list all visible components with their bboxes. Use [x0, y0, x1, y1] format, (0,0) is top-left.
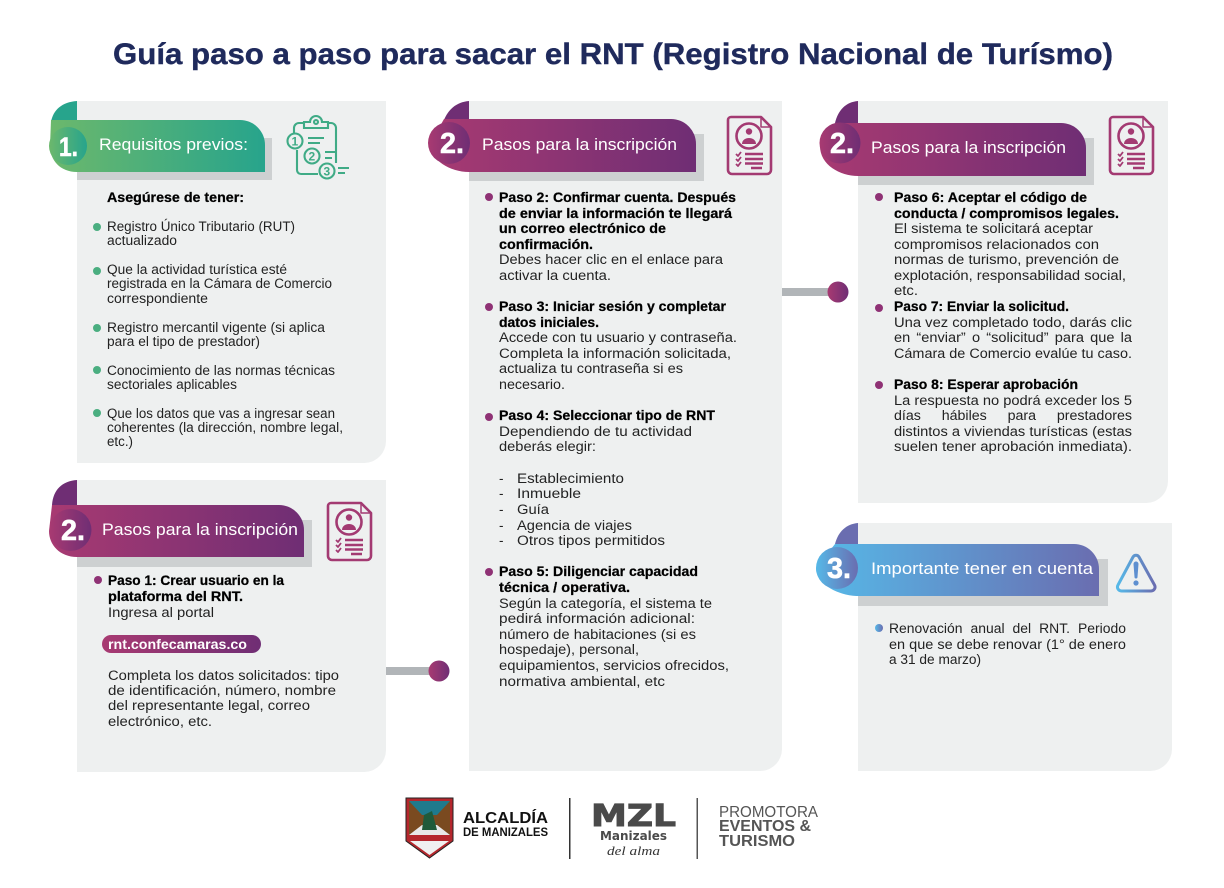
- text: paso 7: Cámara de Comercio evalúe tu caso.: [894, 346, 1132, 361]
- text: checklist: Registro Único Tributario (RUT): [107, 219, 295, 234]
- text: paso 8: Paso 8: Esperar aprobación: [894, 377, 1078, 392]
- text: paso 6: Paso 6: Aceptar el código de: [894, 190, 1088, 205]
- panel: pasos 2 a 5: [428, 101, 782, 771]
- panel: pasos 6 a 8: [820, 101, 1168, 503]
- icon: clipboard checklist: 3: [324, 164, 330, 178]
- text: checklist: correspondiente: [107, 291, 208, 306]
- panel: requisitos previos: [49, 101, 386, 463]
- text: paso 4: deberás elegir:: [499, 439, 596, 454]
- logo: Alcaldía de Manizales: DE MANIZALES: [463, 825, 548, 839]
- text: paso 3: Completa la información solicitada,: [499, 346, 731, 361]
- text: paso 5: normativa ambiental, etc: [499, 674, 665, 689]
- text: renovación: Renovación anual del RNT. Periodo: [889, 621, 1126, 636]
- text: checklist: registrada en la Cámara de Comercio: [107, 276, 332, 291]
- text: checklist: [93, 190, 343, 449]
- link pill: [102, 635, 261, 653]
- logo: Promotora Eventos & Turismo: TURISMO: [719, 833, 795, 850]
- text: paso 6: compromisos relacionados con: [894, 237, 1099, 252]
- section header 2: [49, 480, 312, 567]
- text: paso 8: La respuesta no podrá exceder los 5: [894, 393, 1132, 408]
- section header 2: 2.: [830, 128, 854, 160]
- section header 2: 2.: [440, 128, 464, 160]
- text: paso 5: Paso 5: Diligenciar capacidad: [499, 564, 698, 579]
- logo: Alcaldía de Manizales: ALCALDÍA: [463, 808, 548, 827]
- icon: warning triangle: [1117, 555, 1155, 591]
- text: paso 5: hospedaje), personal,: [499, 642, 639, 657]
- icon: clipboard checklist: [288, 116, 349, 178]
- text: paso 4: Agencia de viajes: [517, 518, 632, 533]
- logo: Alcaldía de Manizales: [406, 798, 548, 858]
- text: paso 6: normas de turismo, prevención de: [894, 252, 1119, 267]
- text: paso 7: en “enviar” o “solicitud” para que la: [894, 330, 1133, 345]
- text: paso 5: número de habitaciones (si es: [499, 627, 696, 642]
- logo: Promotora Eventos & Turismo: PROMOTORA: [719, 804, 818, 821]
- icon: clipboard checklist: 2: [308, 150, 316, 164]
- section header 2: Pasos para la inscripción: [102, 521, 298, 539]
- text: paso 5: Según la categoría, el sistema te: [499, 596, 712, 611]
- text: paso 3: actualiza tu contraseña si es: [499, 361, 683, 376]
- text: checklist: sectoriales aplicables: [107, 377, 237, 392]
- text: paso 2: Debes hacer clic en el enlace para: [499, 252, 724, 267]
- text: paso 2: activar la cuenta.: [499, 268, 611, 283]
- text: paso 6: [875, 190, 1126, 298]
- text: paso 1: plataforma del RNT.: [108, 589, 243, 604]
- text: checklist: Asegúrese de tener:: [107, 190, 244, 205]
- icon: document with profile: [1110, 117, 1153, 174]
- text: paso 1: Completa los datos solicitados: tipo: [108, 668, 339, 683]
- text: checklist: para el tipo de prestador): [107, 334, 260, 349]
- text: paso 2: confirmación.: [499, 237, 593, 252]
- text: paso 8: días hábiles para prestadores: [894, 408, 1132, 423]
- section header 3: Importante tener en cuenta: [871, 560, 1094, 578]
- text: paso 5: equipamientos, servicios ofrecidos,: [499, 658, 729, 673]
- logo: Promotora Eventos & Turismo: EVENTOS &: [719, 818, 811, 835]
- text: paso 1: electrónico, etc.: [108, 714, 212, 729]
- section header 3: 3.: [827, 553, 851, 585]
- text: paso 1: de identificación, número, nombre: [108, 683, 336, 698]
- logo: MZL Manizales del alma: del alma: [607, 843, 661, 858]
- icon: document with profile: [328, 503, 371, 560]
- connector: left to middle: [386, 660, 450, 682]
- text: paso 1: [94, 573, 339, 729]
- text: paso 6: conducta / compromisos legales.: [894, 206, 1119, 221]
- text: paso 6: etc.: [894, 283, 918, 298]
- text: paso 4: -: [499, 486, 504, 501]
- text: paso 8: distintos a viviendas turísticas (estas: [894, 424, 1132, 439]
- section header 2: Pasos para la inscripción: [482, 136, 677, 154]
- section header 2: 2.: [61, 515, 85, 547]
- connector: middle to right: [782, 282, 848, 302]
- text: paso 4: Establecimiento: [517, 471, 624, 486]
- logo: MZL Manizales del alma: Manizales: [600, 829, 667, 843]
- text: paso 2: un correo electrónico de: [499, 221, 667, 236]
- icon: clipboard checklist: 1: [292, 134, 298, 148]
- text: checklist: Registro mercantil vigente (si aplica: [107, 320, 325, 335]
- text: paso 3: datos iniciales.: [499, 315, 599, 330]
- text: paso 4: Guía: [517, 502, 550, 517]
- text: paso 2: Paso 2: Confirmar cuenta. Después: [499, 190, 736, 205]
- section header 2: [820, 101, 1094, 185]
- text: paso 4: Inmueble: [517, 486, 581, 501]
- text: checklist: Que los datos que vas a ingresar sean: [107, 406, 335, 421]
- section header 2: Pasos para la inscripción: [871, 139, 1066, 157]
- text: checklist: coherentes (la dirección, nombre legal,: [107, 420, 343, 435]
- text: checklist: Que la actividad turística esté: [107, 262, 287, 277]
- text: paso 8: suelen tener aprobación inmediata).: [894, 439, 1132, 454]
- text: paso 2: [485, 190, 736, 283]
- logo: MZL Manizales del alma: [591, 799, 676, 858]
- text: paso 4: Dependiendo de tu actividad: [499, 424, 692, 439]
- panel: importante tener en cuenta: [816, 523, 1172, 771]
- text: renovación: [875, 621, 1126, 667]
- title: Guía paso a paso para sacar el RNT (Registro Nacional de Turísmo): [113, 38, 1113, 71]
- section header 1: Requisitos previos:: [99, 136, 248, 154]
- section header 1: [49, 101, 272, 180]
- text: paso 4: Otros tipos permitidos: [517, 533, 665, 548]
- text: renovación: en que se debe renovar (1° de enero: [889, 637, 1126, 652]
- link pill: rnt.confecamaras.co: [108, 637, 247, 652]
- text: paso 5: [485, 564, 729, 689]
- text: paso 1: Paso 1: Crear usuario en la: [108, 573, 284, 588]
- text: checklist: etc.): [107, 434, 133, 449]
- icon: document with profile: [728, 117, 771, 174]
- text: paso 4: -: [499, 533, 504, 548]
- text: paso 1: del representante legal, correo: [108, 698, 310, 713]
- text: paso 2: de enviar la información te llegará: [499, 206, 733, 221]
- text: paso 8: [875, 377, 1132, 454]
- text: paso 7: [875, 299, 1133, 361]
- text: paso 1: Ingresa al portal: [108, 605, 214, 620]
- text: paso 4: -: [499, 502, 504, 517]
- text: paso 4: -: [499, 471, 504, 486]
- text: paso 5: técnica / operativa.: [499, 580, 630, 595]
- text: paso 5: pedirá información adicional:: [499, 611, 695, 626]
- text: paso 7: Paso 7: Enviar la solicitud.: [894, 299, 1069, 314]
- text: paso 6: El sistema te solicitará aceptar: [894, 221, 1094, 236]
- text: checklist: actualizado: [107, 233, 177, 248]
- text: paso 4: Paso 4: Seleccionar tipo de RNT: [499, 408, 716, 423]
- section header 3: [816, 523, 1108, 606]
- text: paso 3: [485, 299, 737, 392]
- text: paso 3: Accede con tu usuario y contraseña.: [499, 330, 737, 345]
- text: paso 3: Paso 3: Iniciar sesión y completar: [499, 299, 727, 314]
- footer logos: [406, 798, 818, 859]
- text: paso 6: explotación, responsabilidad social,: [894, 268, 1126, 283]
- panel: pasos inscripción, paso 1: [49, 480, 386, 772]
- text: paso 7: Una vez completado todo, darás clic: [894, 315, 1132, 330]
- section header 2: [428, 101, 704, 181]
- text: renovación: a 31 de marzo): [889, 652, 981, 667]
- logo: MZL Manizales del alma: MZL: [591, 799, 676, 834]
- text: paso 4: [485, 408, 716, 548]
- text: paso 3: necesario.: [499, 377, 565, 392]
- section header 1: 1.: [59, 132, 78, 162]
- text: checklist: Conocimiento de las normas técnicas: [107, 363, 335, 378]
- text: paso 4: -: [499, 518, 504, 533]
- logo: Promotora Eventos & Turismo: [719, 804, 818, 850]
